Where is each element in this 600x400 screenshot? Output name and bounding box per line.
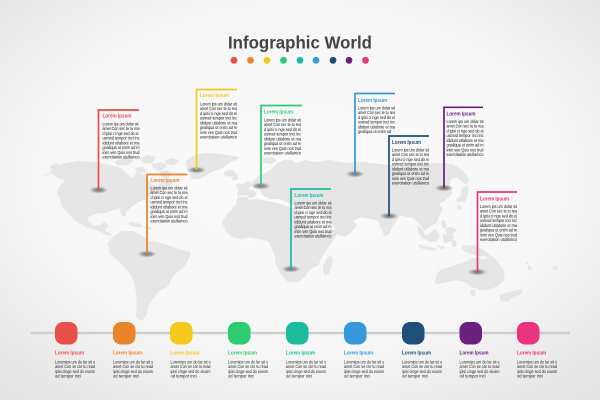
text block: pink: gnaliqua ut enim ad m bbox=[480, 228, 517, 234]
text block: teal: usmod tempor inci inc bbox=[294, 215, 332, 221]
heading: pink: Lorem Ipsum bbox=[480, 196, 509, 202]
timeline item 6 bbox=[344, 322, 385, 378]
flag: orange bbox=[137, 174, 188, 258]
flag: red bbox=[88, 110, 140, 194]
pole and bar: green bbox=[261, 106, 302, 186]
heading: teal: Lorem Ipsum bbox=[294, 193, 324, 199]
pole and bar: teal bbox=[291, 189, 331, 269]
text block: orange: usmod tempor inci inc bbox=[150, 200, 188, 206]
world map bbox=[35, 153, 557, 320]
timeline item 8 bbox=[460, 322, 500, 378]
text block: teal: gnaliqua ut enim ad m bbox=[294, 224, 332, 230]
text block: red: ididunt utlabore et ma bbox=[102, 140, 140, 146]
text block: green: Lorem ips um dolar sit bbox=[264, 118, 301, 124]
timeline item 3 bbox=[170, 322, 211, 378]
text block: navy: inim ven Quis nos trud bbox=[392, 176, 429, 182]
timeline item 2: Lorem Ipsum bbox=[113, 350, 142, 356]
text block: orange: amet Con sec te tu rea bbox=[150, 190, 188, 196]
timeline item 6: ipisi cinge sed do eiusm bbox=[344, 369, 384, 374]
text block: green: d ipisi ci nge sed do ei bbox=[264, 127, 301, 133]
text block: pink: amet Con sec te tu rea bbox=[480, 209, 517, 215]
timeline item 9: Lorem Ipsum bbox=[517, 350, 546, 356]
text block: green: ididunt utlabore et ma bbox=[264, 136, 301, 142]
flag: blue bbox=[345, 94, 395, 178]
timeline item 8: ipisi cinge sed do eiusm bbox=[460, 369, 500, 374]
text block: red: amet Con sec te tu rea bbox=[102, 126, 140, 132]
text block: red: usmod tempor inci inc bbox=[102, 136, 140, 142]
text block: blue: usmod tempor inci inc bbox=[358, 120, 395, 126]
timeline bbox=[31, 322, 570, 378]
timeline item 2: amet Con se cte tu read bbox=[113, 364, 153, 369]
text block: red: exercitation utullamco bbox=[102, 154, 140, 160]
timeline item 7: od tempor inci bbox=[402, 374, 428, 378]
timeline item 8: amet Con se cte tu read bbox=[460, 364, 500, 369]
flag: pink bbox=[468, 192, 517, 276]
text block: navy: d ipisi ci nge sed do ei bbox=[392, 157, 429, 163]
text block: teal: ididunt utlabore et ma bbox=[294, 219, 332, 225]
timeline item 7 bbox=[402, 322, 443, 378]
text block: purple: Lorem ips um dolar sit bbox=[446, 119, 484, 125]
timeline item 5: od tempor inci bbox=[286, 374, 312, 378]
text block: yellow: amet Con sec te tu rea bbox=[200, 106, 237, 112]
text block: blue bbox=[358, 106, 395, 135]
heading: purple: Lorem Ipsum bbox=[446, 112, 476, 118]
text block: green: gnaliqua ut enim ad m bbox=[264, 141, 301, 147]
text block: teal: Lorem ips um dolar sit bbox=[294, 200, 332, 206]
timeline item 2: od tempor inci bbox=[113, 374, 139, 378]
text block: purple: amet Con sec te tu rea bbox=[446, 124, 484, 130]
timeline item 4: od tempor inci bbox=[228, 374, 254, 378]
text block: orange: inim ven Quis nos trud bbox=[150, 214, 188, 220]
pin shadow: pink bbox=[468, 268, 488, 276]
flag: yellow bbox=[186, 90, 237, 174]
text block: pink: usmod tempor inci inc bbox=[480, 218, 517, 224]
pin shadow: blue bbox=[345, 170, 365, 178]
heading: yellow: Lorem Ipsum bbox=[200, 93, 229, 99]
text block: red: Lorem ips um dolar sit bbox=[102, 122, 139, 128]
text block: purple: ididunt utlabore et ma bbox=[446, 138, 484, 144]
timeline item 2: ipisi cinge sed do eiusm bbox=[113, 369, 153, 374]
text block: blue: ididunt utlabore et ma bbox=[358, 124, 395, 130]
text block: navy: ididunt utlabore et ma bbox=[392, 166, 429, 172]
flag: teal bbox=[281, 189, 332, 273]
text block: red: inim ven Quis nos trud bbox=[102, 150, 140, 156]
text block: teal: exercitation utullamco bbox=[294, 234, 332, 240]
timeline item 4: Loremips um do lar sit s bbox=[228, 359, 269, 364]
text block: blue: Lorem ips um dolar sit bbox=[358, 106, 395, 112]
text block: orange: exercitation utullamco bbox=[150, 218, 188, 224]
text block: purple bbox=[446, 119, 484, 158]
text block: yellow: ididunt utlabore et ma bbox=[200, 120, 237, 126]
timeline item 4: ipisi cinge sed do eiusm bbox=[228, 369, 268, 374]
timeline item 4: Lorem Ipsum bbox=[228, 350, 257, 356]
pole and bar: purple bbox=[444, 107, 483, 188]
pin shadow: green bbox=[251, 182, 271, 190]
text block: navy: Lorem ips um dolar sit bbox=[392, 148, 429, 154]
text block: yellow bbox=[200, 102, 237, 140]
timeline item 3: amet Con se cte tu read bbox=[170, 364, 211, 369]
timeline item 2 bbox=[113, 322, 154, 378]
text block: orange: Lorem ips um dolar sit bbox=[150, 186, 188, 192]
text block: blue: gnaliqua ut enim ad bbox=[358, 129, 391, 135]
pin shadow: navy bbox=[379, 212, 399, 220]
heading: navy: Lorem Ipsum bbox=[392, 140, 421, 146]
pole and bar: navy bbox=[389, 136, 429, 216]
text block: purple: inim ven Quis nos trud bbox=[446, 147, 484, 153]
text block: yellow: Lorem ips um dolar sit bbox=[200, 102, 237, 108]
pin shadow: orange bbox=[137, 250, 157, 258]
text block: red: d ipisi ci nge sed do ei bbox=[102, 131, 138, 137]
timeline item 9: od tempor inci bbox=[517, 374, 543, 378]
text block: green: exercitation utullamco bbox=[264, 150, 301, 156]
heading: green: Lorem Ipsum bbox=[264, 110, 293, 116]
text block: pink bbox=[480, 204, 517, 243]
pin shadow: yellow bbox=[186, 166, 206, 174]
text block: yellow: inim ven Quis nos trud bbox=[200, 130, 237, 136]
text block: green bbox=[264, 118, 301, 156]
timeline item 7: Lorem Ipsum bbox=[402, 350, 431, 356]
text block: pink: exercitation utullamco bbox=[480, 237, 517, 243]
timeline item 1: Lorem Ipsum bbox=[55, 350, 84, 356]
timeline item 9: ipisi cinge sed do eiusm bbox=[517, 369, 557, 374]
timeline item 4: amet Con se cte tu read bbox=[228, 364, 268, 369]
text block: purple: exercitation utullamco bbox=[446, 152, 484, 158]
timeline item 5: amet Con se cte tu read bbox=[286, 364, 326, 369]
timeline item 2: Loremips um do lar sit s bbox=[113, 359, 154, 364]
timeline item 5: Loremips um do lar sit s bbox=[286, 359, 327, 364]
timeline item 9 bbox=[517, 322, 558, 378]
pole and bar: pink bbox=[478, 192, 517, 272]
text block: yellow: d ipisi ci nge sed do ei bbox=[200, 111, 237, 117]
timeline item 4 bbox=[228, 322, 269, 378]
pin shadow: red bbox=[88, 186, 108, 194]
timeline item 5: ipisi cinge sed do eiusm bbox=[286, 369, 326, 374]
text block: navy: usmod tempor inci inc bbox=[392, 162, 429, 168]
timeline item 1: ipisi cinge sed do eiusm bbox=[55, 369, 95, 374]
pole and bar: red bbox=[98, 110, 139, 190]
text block: yellow: gnaliqua ut enim ad m bbox=[200, 125, 237, 131]
timeline item 3: Lorem Ipsum bbox=[170, 350, 200, 356]
heading: red: Lorem Ipsum bbox=[102, 114, 132, 120]
text block: teal: inim ven Quis nos trud bbox=[294, 229, 332, 235]
text block: orange bbox=[150, 186, 188, 224]
timeline item 3: ipisi cinge sed do eiusm bbox=[170, 369, 211, 374]
timeline item 6: Lorem Ipsum bbox=[344, 350, 373, 356]
text block: red bbox=[102, 122, 140, 160]
timeline item 9: amet Con se cte tu read bbox=[517, 364, 557, 369]
pole and bar: yellow bbox=[196, 90, 237, 170]
text block: orange: ididunt utlabore et ma bbox=[150, 204, 188, 210]
text block: green: amet Con sec te tu rea bbox=[264, 122, 301, 128]
timeline item 1: Loremips um do lar sit s bbox=[55, 359, 96, 364]
text block: purple: d ipisi ci nge sed do ei bbox=[446, 128, 484, 134]
text block: navy: exercitation utullamco bbox=[392, 180, 429, 186]
text block: pink: Lorem ips um dolar sit bbox=[480, 204, 517, 210]
text block: teal: amet Con sec te tu rea bbox=[294, 205, 332, 211]
timeline item 8: Lorem Ipsum bbox=[460, 350, 489, 356]
timeline item 9: Loremips um do lar sit s bbox=[517, 359, 558, 364]
timeline item 7: amet Con se cte tu read bbox=[402, 364, 442, 369]
pole and bar: orange bbox=[147, 174, 188, 254]
text block: blue: amet Con sec te tu rea bbox=[358, 110, 395, 116]
timeline item 1: od tempor inci bbox=[55, 374, 81, 378]
timeline item 8: Loremips um do lar sit s bbox=[460, 359, 500, 364]
timeline item 3: od tempor inci bbox=[170, 374, 196, 378]
timeline item 1: amet Con se cte tu read bbox=[55, 364, 95, 369]
timeline item 3: Loremips um do lar sit s bbox=[170, 359, 211, 364]
pin shadow: purple bbox=[434, 184, 454, 192]
text block: blue: d ipisi ci nge sed do ei bbox=[358, 115, 395, 121]
timeline item 6: amet Con se cte tu read bbox=[344, 364, 384, 369]
timeline item 7: ipisi cinge sed do eiusm bbox=[402, 369, 442, 374]
timeline item 5 bbox=[286, 322, 327, 378]
timeline item 8: od tempor inci bbox=[460, 374, 486, 378]
text block: green: usmod tempor inci inc bbox=[264, 132, 301, 138]
text block: yellow: exercitation utullamco bbox=[200, 134, 237, 140]
pole and bar: blue bbox=[355, 94, 395, 174]
text block: pink: inim ven Quis nos trud bbox=[480, 232, 517, 238]
text block: navy: amet Con sec te tu rea bbox=[392, 152, 429, 158]
title: Infographic World bbox=[228, 32, 372, 52]
timeline item 7: Loremips um do lar sit s bbox=[402, 359, 443, 364]
flag: purple bbox=[434, 107, 484, 192]
text block: pink: ididunt utlabore et ma bbox=[480, 223, 517, 229]
text block: yellow: usmod tempor inci inc bbox=[200, 116, 237, 122]
text block: navy bbox=[392, 148, 429, 186]
colour dots row bbox=[231, 57, 369, 64]
text block: green: inim ven Quis nos trud bbox=[264, 146, 301, 152]
pin shadow: teal bbox=[281, 265, 301, 273]
text block: pink: d ipisi ci nge sed do ei bbox=[480, 214, 517, 220]
heading: orange: Lorem Ipsum bbox=[150, 178, 180, 184]
text block: navy: gnaliqua ut enim ad m bbox=[392, 171, 429, 177]
text block: purple: gnaliqua ut enim ad m bbox=[446, 143, 484, 149]
heading: blue: Lorem Ipsum bbox=[358, 98, 387, 104]
text block: red: gnaliqua ut enim ad m bbox=[102, 145, 140, 151]
text block: purple: usmod tempor inci inc bbox=[446, 133, 484, 139]
timeline item 1 bbox=[55, 322, 96, 378]
timeline item 6: Loremips um do lar sit s bbox=[344, 359, 385, 364]
text block: teal bbox=[294, 200, 332, 240]
timeline item 5: Lorem Ipsum bbox=[286, 350, 315, 356]
timeline line bbox=[31, 332, 570, 334]
text block: orange: d ipisi ci nge sed do ei bbox=[150, 195, 188, 201]
timeline item 6: od tempor inci bbox=[344, 374, 370, 378]
text block: teal: d ipisi ci nge sed do ei bbox=[294, 210, 332, 216]
flag: navy bbox=[379, 136, 429, 220]
text block: orange: gnaliqua ut enim ad m bbox=[150, 209, 188, 215]
flag: green bbox=[251, 106, 302, 190]
